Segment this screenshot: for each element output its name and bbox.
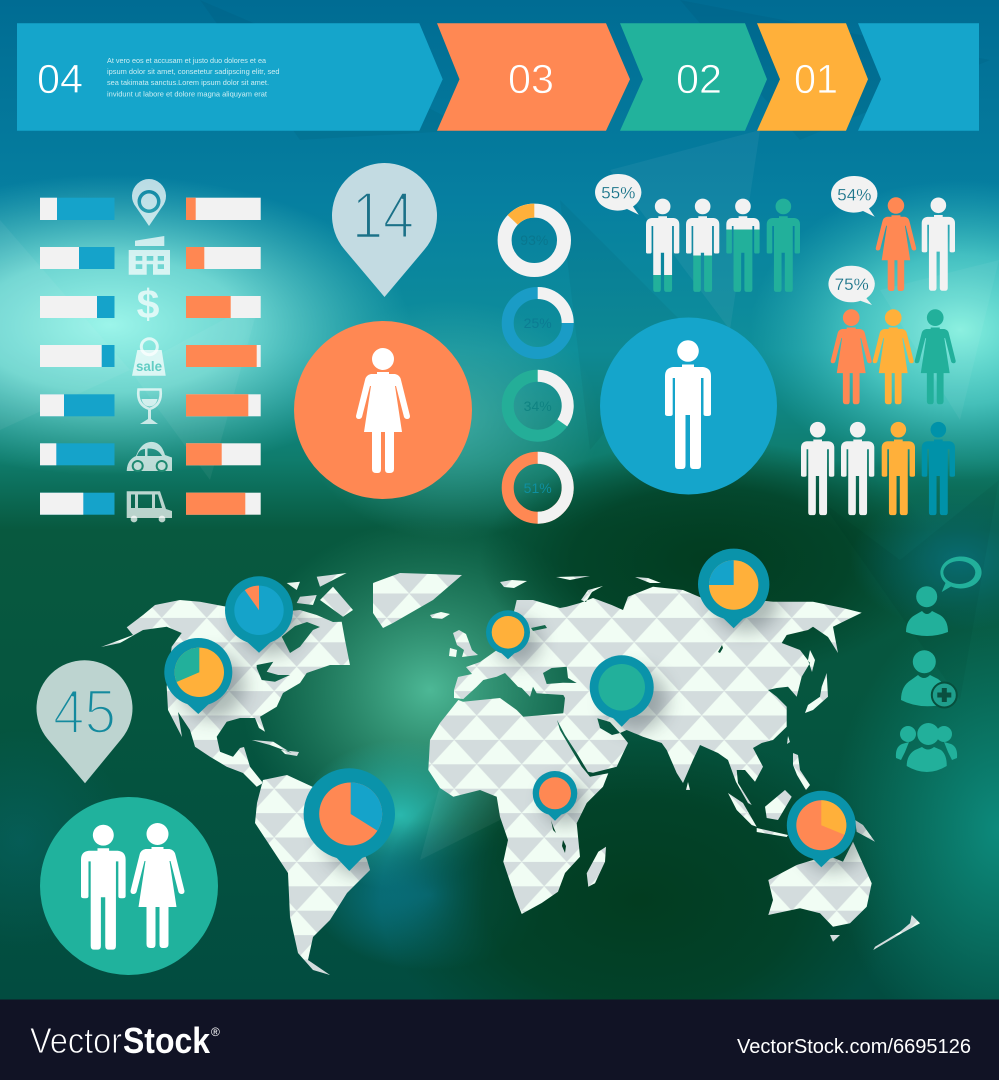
map pin: East Africa (533, 771, 577, 821)
panel: left bars (40, 198, 114, 515)
intro text: invidunt ut labore et dolore magna aliquyam erat (107, 89, 267, 98)
circle: man (600, 318, 777, 494)
footer logo (30, 1020, 220, 1061)
panel: category icons (127, 179, 172, 522)
icon: dollar: $ (137, 281, 160, 327)
map pin: Russia (698, 549, 769, 628)
footer url: VectorStock.com/6695126 (737, 1036, 971, 1058)
icon: sale bag (132, 339, 166, 376)
map pin: Canada (225, 576, 293, 653)
icon: user with speech bubble (906, 556, 982, 636)
footer bar (0, 1000, 999, 1080)
arrow 03 (437, 23, 630, 131)
arrow 04 (17, 23, 443, 131)
donut: 25% (508, 293, 568, 353)
intro text: sea takimata sanctus.Lorem ipsum dolor sit amet. (107, 78, 269, 87)
arrow 04: 04 (37, 56, 83, 102)
donut: 93%: 93% (520, 232, 548, 248)
icon: wine glass (138, 390, 161, 424)
arrow blank (858, 23, 979, 131)
donut: 93% (505, 211, 564, 270)
pin shadows on map (179, 564, 866, 876)
arrow 02 (620, 23, 767, 131)
circle: woman (294, 321, 472, 499)
pin: 45: 45 (53, 678, 116, 747)
icon: car (127, 442, 172, 472)
donut: 34%: 34% (524, 398, 552, 414)
callout: 75%: 75% (835, 275, 869, 294)
icon: bus (127, 491, 172, 522)
footer logo: ® (211, 1025, 220, 1039)
donut: 51% (508, 458, 568, 518)
intro text: At vero eos et accusam et justo duo dolores et ea (107, 56, 267, 65)
icon: location pin (132, 179, 166, 226)
icon: user group (896, 723, 957, 772)
people: 75% women row (831, 309, 956, 404)
icon: add user (901, 650, 957, 708)
map pin: Australia (787, 791, 856, 867)
map pin: Brazil (304, 768, 395, 871)
callout: 55%: 55% (601, 184, 635, 202)
callout: 75% (828, 266, 875, 305)
map pin: Middle East (590, 655, 654, 727)
intro text: ipsum dolor sit amet, consetetur sadipscing elitr, sed (107, 67, 280, 76)
arrow 01 (757, 23, 868, 131)
circle: couple (40, 797, 218, 975)
pin: 45 (37, 660, 133, 783)
donut: 34% (508, 376, 568, 436)
top arrow banner (17, 23, 979, 131)
icon: building (129, 236, 170, 275)
donut: 25%: 25% (524, 315, 552, 331)
icon: sale bag: sale (136, 358, 162, 374)
map pin: USA (164, 638, 232, 714)
people: men row bottom (801, 422, 955, 515)
map pin: Europe (486, 610, 530, 659)
arrow 01: 01 (794, 56, 838, 102)
pin: 14: 14 (352, 178, 414, 252)
arrow 02: 02 (676, 56, 722, 102)
callout: 55% (595, 174, 641, 215)
footer logo: Vector (30, 1020, 122, 1061)
world map (101, 573, 920, 975)
callout: 54% (831, 176, 877, 217)
people: 54% pair (876, 197, 955, 291)
people: 55% men row (646, 199, 800, 292)
callout: 54%: 54% (837, 186, 871, 204)
panel: right bars (186, 198, 261, 515)
pin: 14 (332, 163, 437, 297)
footer logo: Stock (123, 1020, 211, 1061)
donut: 51%: 51% (524, 480, 552, 496)
arrow 03: 03 (508, 56, 554, 102)
intro text (107, 56, 280, 98)
